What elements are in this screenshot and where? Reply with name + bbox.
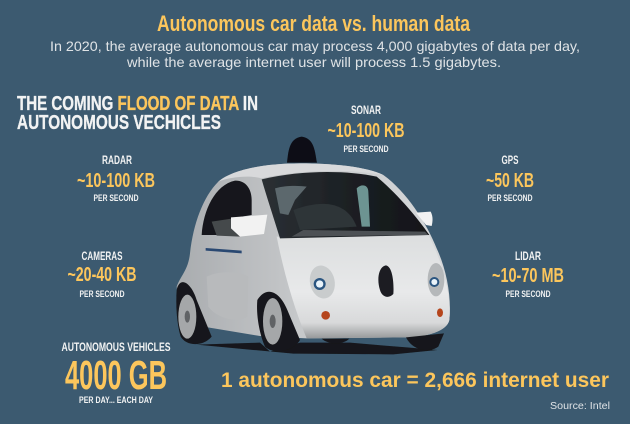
label: cameras: ~20-40 KB <box>68 264 136 286</box>
label: lidar <box>492 251 564 299</box>
label: autonomous vehicles total: 4000 GB <box>65 352 167 398</box>
subtitle text: In 2020, the average autonomous car may process 4,000 gigabytes of data per day, <box>50 38 580 54</box>
roof sensor <box>287 137 317 163</box>
label: sonar: ~10-100 KB <box>328 120 404 142</box>
right headlight <box>428 263 444 296</box>
left headlight <box>307 263 338 301</box>
side window <box>202 181 252 235</box>
label: autonomous vehicles total: AUTONOMOUS VEHICLES <box>62 340 170 354</box>
label: gps: ~50 KB <box>486 170 534 192</box>
windshield reflections <box>275 185 428 237</box>
car body <box>177 163 450 338</box>
label: autonomous vehicles total: PER DAY... EACH DAY <box>79 395 153 406</box>
label: radar: ~10-100 KB <box>77 170 155 192</box>
front wheel <box>257 292 300 351</box>
door stripe <box>206 248 242 253</box>
label: radar: RADAR <box>102 155 132 167</box>
comparison callout: 1 autonomous car = 2,666 internet user <box>221 369 609 392</box>
label: sonar <box>328 105 404 154</box>
label: gps: GPS <box>502 155 519 167</box>
label: lidar: PER SECOND <box>506 289 551 299</box>
label: cameras: CAMERAS <box>82 251 123 263</box>
mirror mount <box>212 219 240 237</box>
label: radar: PER SECOND <box>94 193 139 203</box>
label: cameras <box>68 251 136 299</box>
label: gps: PER SECOND <box>488 193 533 203</box>
label: sonar: PER SECOND <box>344 144 389 154</box>
subtitle text: while the average internet user will process 1.5 gigabytes. <box>126 54 501 70</box>
label: gps <box>486 155 534 203</box>
heading: the coming flood of data: AUTONOMOUS VECHICLES <box>17 112 221 134</box>
label: autonomous vehicles total <box>62 340 170 406</box>
car roof highlight <box>218 163 383 182</box>
label: cameras: PER SECOND <box>80 289 125 299</box>
source: Source: Intel <box>550 401 610 412</box>
door panel <box>207 272 248 320</box>
label: lidar: LIDAR <box>515 251 542 263</box>
icon: autonomous car photo <box>176 137 450 354</box>
title: Autonomous car data vs. human data <box>157 11 471 36</box>
windshield <box>262 172 429 238</box>
label: sonar: SONAR <box>351 105 382 117</box>
right mirror <box>416 212 433 226</box>
rear wheel <box>176 282 212 344</box>
turn signals <box>321 308 443 320</box>
heading: the coming flood of data: THE COMING FLOOD OF DATA IN <box>17 93 258 115</box>
far wheels <box>322 333 444 350</box>
label: radar <box>77 155 155 203</box>
center sensor <box>378 265 394 297</box>
car front panel <box>277 235 450 338</box>
car ground shadow <box>197 343 437 354</box>
label: lidar: ~10-70 MB <box>492 265 564 287</box>
subtitle text <box>50 38 580 70</box>
side mirror <box>231 215 267 237</box>
heading: the coming flood of data <box>17 93 258 134</box>
